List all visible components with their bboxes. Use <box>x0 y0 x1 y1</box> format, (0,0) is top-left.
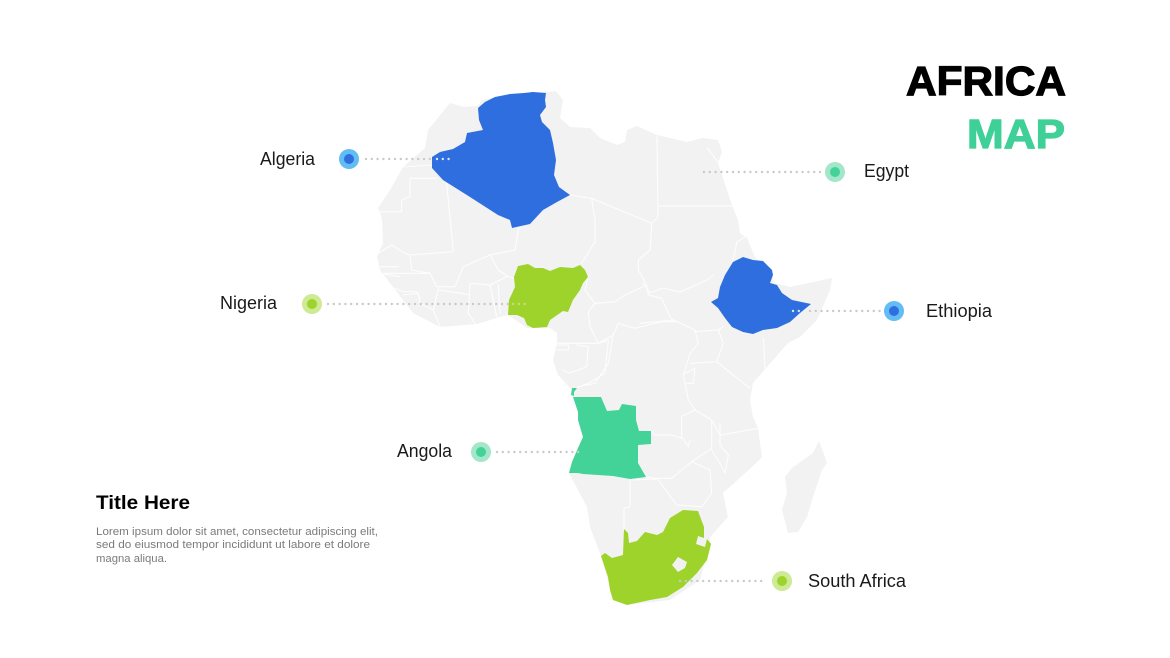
title <box>906 58 1066 157</box>
map of Africa <box>377 91 832 605</box>
title line: AFRICA: AFRICA <box>906 58 1066 104</box>
South Africa <box>601 510 711 605</box>
country borders: north and south <box>403 136 745 530</box>
Algeria <box>432 92 570 228</box>
body copy: magna aliqua. <box>96 553 167 565</box>
callout: Angola <box>397 441 584 462</box>
title line: MAP: MAP <box>967 111 1065 157</box>
callout: Algeria <box>260 149 450 169</box>
country borders: east and southeast <box>640 320 765 507</box>
callout: Egypt <box>704 161 909 182</box>
Nigeria <box>508 264 588 328</box>
callout: Angola: Angola <box>397 441 453 461</box>
island: Madagascar <box>782 441 827 533</box>
body copy <box>96 526 378 565</box>
text heading: Title Here <box>96 493 190 514</box>
Cabinda exclave <box>571 388 577 396</box>
continent base shape <box>377 91 832 605</box>
callout: Algeria: Algeria <box>260 149 316 169</box>
body copy: Lorem ipsum dolor sit amet, consectetur adipiscing elit, <box>96 526 378 538</box>
callout: South Africa <box>680 571 907 591</box>
country borders: west and central <box>378 178 675 390</box>
callout: Egypt: Egypt <box>864 161 909 181</box>
callout: Ethiopia: Ethiopia <box>926 301 993 321</box>
callout: Nigeria <box>220 293 525 314</box>
Angola mainland <box>569 397 651 479</box>
callout: South Africa: South Africa <box>808 571 907 591</box>
Angola <box>569 388 651 479</box>
callout: Nigeria: Nigeria <box>220 293 278 313</box>
Ethiopia <box>711 257 811 334</box>
text block <box>96 493 378 565</box>
callout: Ethiopia <box>793 301 993 321</box>
body copy: sed do eiusmod tempor incididunt ut labore et dolore <box>96 539 370 551</box>
